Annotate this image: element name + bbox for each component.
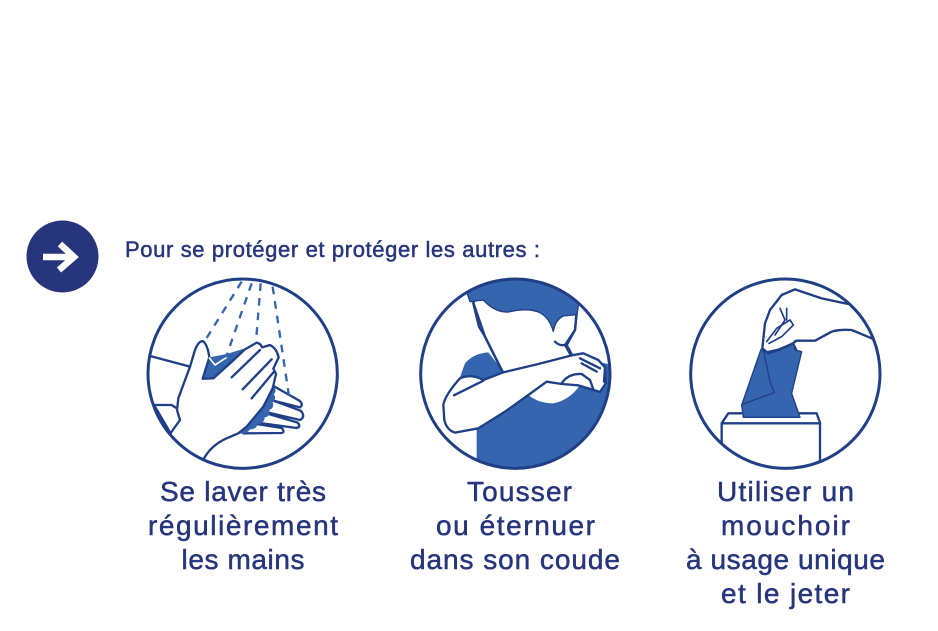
hair: [466, 280, 579, 332]
body: [458, 352, 613, 473]
back hand fingers: [243, 385, 303, 433]
arm and hand: [443, 353, 606, 433]
caption: cough: ou éternuer: [436, 510, 595, 541]
caption: cough: dans son coude: [410, 544, 620, 575]
icon: tissue: [691, 279, 888, 483]
caption: tissue: mouchoir: [721, 510, 850, 541]
icon: arrow badge: [26, 220, 98, 292]
tissue: [742, 343, 802, 417]
icon: cough in elbow: [421, 277, 613, 473]
caption: wash hands: Se laver très: [160, 476, 326, 507]
hand: [762, 289, 888, 353]
box: [720, 412, 822, 460]
front hand: [170, 340, 280, 459]
caption: wash hands: [148, 476, 338, 575]
caption: tissue: à usage unique: [686, 544, 885, 575]
soap lather: [203, 348, 276, 434]
caption: wash hands: les mains: [182, 544, 304, 575]
caption: wash hands: régulièrement: [148, 510, 338, 541]
head: [472, 302, 578, 371]
caption: cough: Tousser: [467, 476, 572, 507]
caption: tissue: [686, 476, 885, 609]
caption: tissue: et le jeter: [721, 578, 850, 609]
sleeve: [150, 356, 190, 433]
caption: cough: [410, 476, 620, 575]
water jets: [205, 282, 289, 398]
neckline: [528, 382, 580, 403]
heading: Pour se protéger et protéger les autres :: [125, 237, 540, 262]
caption: tissue: Utiliser un: [717, 476, 854, 507]
icon: washing hands: [148, 279, 337, 477]
